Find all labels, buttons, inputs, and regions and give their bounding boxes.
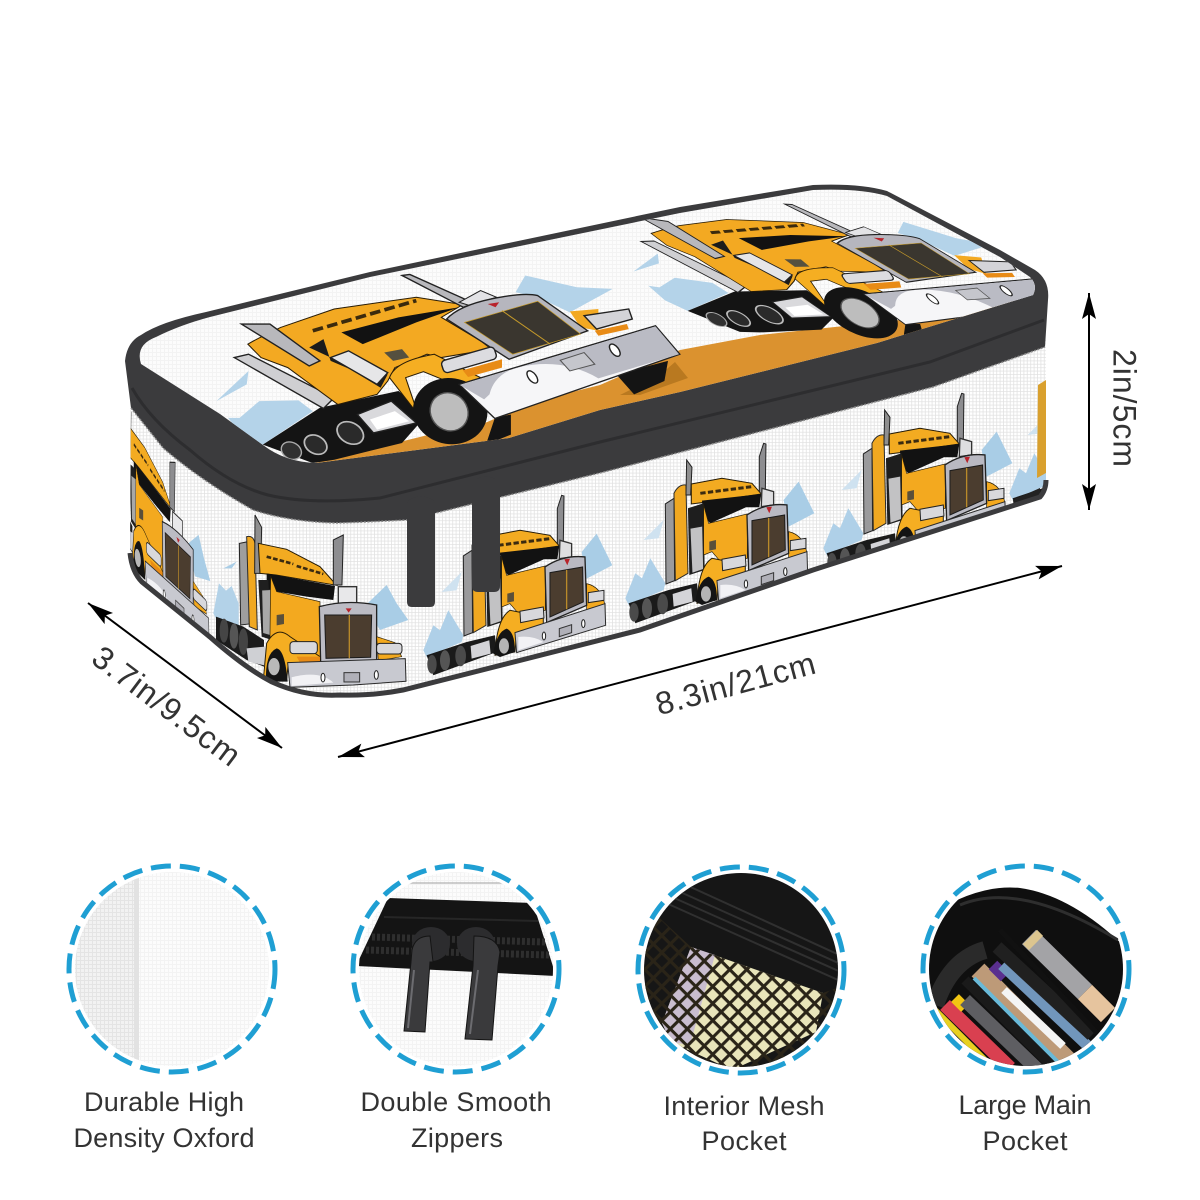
caption: Pocket (982, 1126, 1068, 1156)
length arrow (338, 566, 1062, 757)
feature: double zippers (350, 865, 562, 1153)
side panel with repeating truck print (128, 340, 1048, 698)
open pocket close-up circle (925, 888, 1123, 1075)
feature: large main pocket (923, 866, 1129, 1156)
left zipper pull (404, 936, 433, 1032)
width arrow (88, 603, 282, 748)
zipper close-up circle (359, 872, 553, 1066)
feature: interior mesh pocket (638, 867, 846, 1156)
mesh close-up circle (644, 873, 838, 1067)
dashed ring (638, 867, 844, 1073)
length dimension (338, 566, 1062, 757)
height label: 2in/5cm (1107, 349, 1143, 467)
zipper pull tab right (472, 476, 500, 592)
caption: Density Oxford (74, 1123, 254, 1153)
dashed ring (69, 866, 275, 1072)
width dimension (85, 603, 282, 773)
height arrow (1088, 293, 1090, 510)
caption: Interior Mesh (664, 1091, 824, 1121)
length label: 8.3in/21cm (651, 645, 819, 722)
pencil case product photo (125, 184, 1048, 698)
caption: Pocket (702, 1126, 787, 1156)
feature: durable oxford fabric (69, 866, 275, 1153)
top lid with truck print (140, 190, 1035, 463)
pens and pencils (935, 930, 1108, 1075)
fabric close-up circle (70, 868, 274, 1072)
width label: 3.7in/9.5cm (85, 639, 248, 773)
caption: Double Smooth (360, 1087, 552, 1117)
caption: Zippers (411, 1123, 503, 1153)
caption: Large Main (958, 1090, 1092, 1120)
dashed ring (923, 866, 1129, 1072)
zipper band around lid (125, 185, 1048, 523)
caption: Durable High (84, 1087, 244, 1117)
right zipper pull (465, 936, 500, 1040)
dashed ring (353, 866, 559, 1072)
zipper pull tab left (407, 496, 435, 607)
